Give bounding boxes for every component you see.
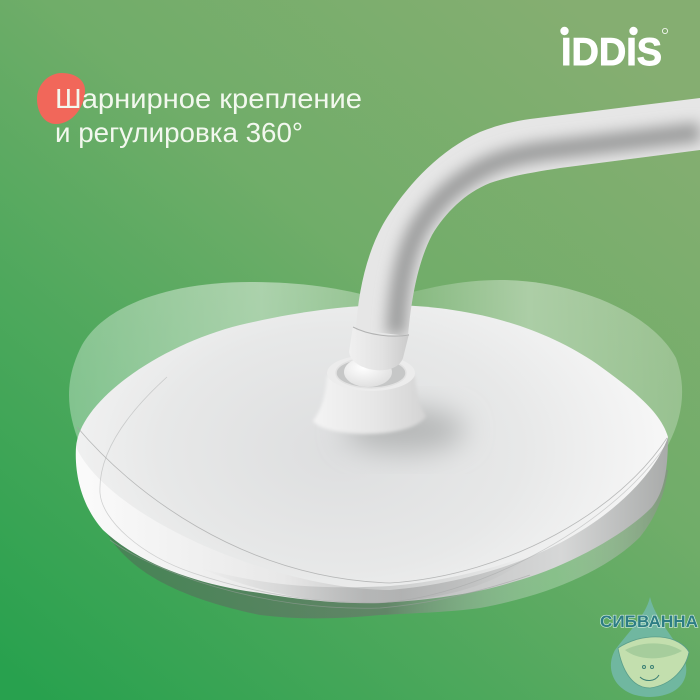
- collar joint line: [353, 327, 409, 336]
- accent blob: [37, 73, 85, 124]
- ghost disc: rotated right position: [375, 280, 682, 445]
- bearing ring: [336, 358, 406, 388]
- ball joint: [344, 357, 392, 387]
- base top surface: [76, 305, 668, 590]
- base rim: [76, 437, 668, 603]
- curved tube: [340, 90, 700, 340]
- logo: iDDiS: IDDIS: [561, 31, 662, 74]
- water drop: [611, 597, 686, 697]
- watermark: СИБВАННА: [600, 597, 698, 697]
- collar: [349, 326, 409, 370]
- neck cone: [313, 376, 426, 434]
- tub inner: [625, 643, 682, 658]
- heading text: Шарнирное крепление: [55, 83, 362, 114]
- bathtub: [618, 637, 689, 688]
- heading with red accent dot: [37, 73, 362, 148]
- cone top ring: [327, 355, 415, 391]
- lamp base swivel illustration: [69, 90, 700, 618]
- soft shadow under neck: [345, 408, 465, 452]
- overlap contour lines: [77, 377, 668, 608]
- gray overlap band at front edge: [200, 555, 530, 603]
- ghost disc: rotated left position: [69, 282, 420, 445]
- ghost disc: lower dark edge: [105, 470, 668, 618]
- watermark text: СИБВАННА: [600, 613, 698, 631]
- tub face: [640, 666, 659, 681]
- heading text: и регулировка 360°: [55, 117, 303, 148]
